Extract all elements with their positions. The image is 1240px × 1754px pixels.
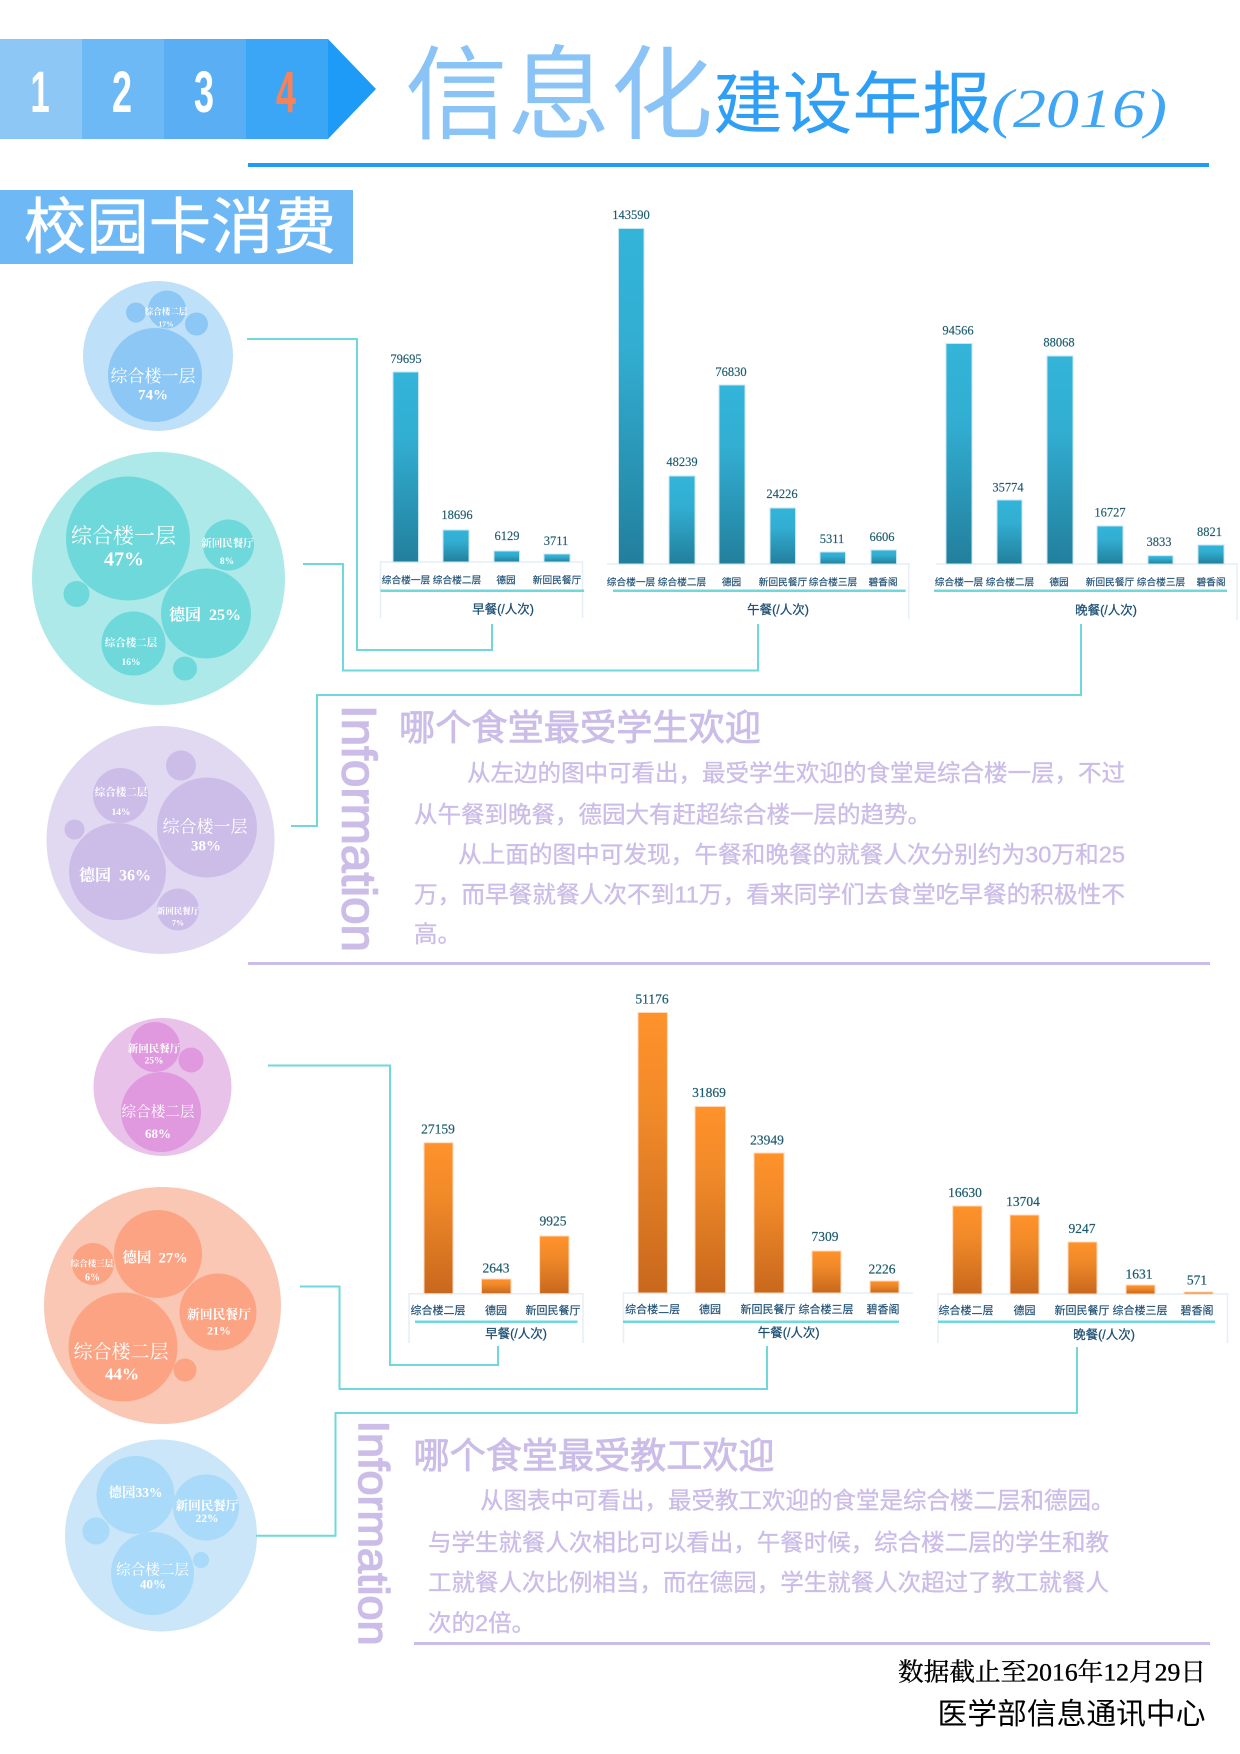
bar chart: staff dinner: 16630	[948, 1185, 982, 1200]
bar chart: staff dinner: 1631	[1126, 1266, 1152, 1282]
bar chart: student breakfast: 综合楼二层	[433, 574, 482, 587]
information panel: staff	[349, 1420, 1114, 1646]
information panel: students	[332, 705, 1125, 952]
bar chart: staff lunch: 7309	[812, 1229, 839, 1244]
bubble chart: staff breakfast	[94, 1018, 232, 1156]
bar chart: staff dinner: 571	[1187, 1272, 1207, 1288]
bubble chart: staff lunch: 21%	[207, 1324, 231, 1338]
bar chart: staff dinner: 德园	[1014, 1303, 1036, 1317]
bar chart: student dinner: 德园	[1049, 576, 1069, 589]
header arrow band: 2	[112, 60, 132, 125]
bar chart: staff breakfast: 2643	[482, 1260, 510, 1276]
bar chart: student dinner: 综合楼三层	[1137, 576, 1186, 589]
bar chart: student lunch: 76830	[715, 365, 747, 379]
bar chart: student dinner: 35774	[992, 480, 1024, 494]
bar chart: staff lunch: 午餐(/人次)	[758, 1325, 820, 1340]
information panel: staff: 与学生就餐人次相比可以看出，午餐时候，综合楼二层的学生和教	[428, 1530, 1109, 1556]
bubble chart: student dinner: 14%	[112, 808, 130, 818]
bar chart: student breakfast: 3711	[544, 534, 568, 548]
bubble chart: student lunch: 综合楼一层	[71, 524, 176, 548]
bar chart: staff dinner: 13704	[1006, 1194, 1040, 1209]
information panel: students: 从上面的图中可发现，午餐和晚餐的就餐人次分别约为30万和25	[458, 842, 1125, 868]
bar chart: student breakfast	[380, 352, 584, 618]
bar chart: staff lunch: 新回民餐厅	[740, 1302, 796, 1316]
bar chart: student lunch: 143590	[612, 208, 650, 222]
bar chart: staff lunch: 综合楼三层	[798, 1302, 854, 1316]
bar chart: student lunch: 48239	[666, 455, 698, 469]
bar chart: staff breakfast: 综合楼二层	[410, 1303, 466, 1317]
bar chart: staff dinner: 9247	[1068, 1221, 1096, 1236]
bar chart: staff dinner: 综合楼二层	[938, 1303, 994, 1317]
bubble chart: staff lunch: 综合楼二层	[73, 1341, 169, 1363]
bar chart: staff breakfast: 早餐(/人次)	[485, 1326, 547, 1341]
bubble chart: student breakfast: 74%	[138, 388, 168, 404]
bar chart: student lunch: 6606	[870, 530, 894, 544]
bar chart: student dinner: 8821	[1197, 525, 1222, 539]
information panel: staff: 哪个食堂最受教工欢迎	[414, 1435, 774, 1476]
bar chart: staff lunch: 51176	[635, 992, 669, 1006]
bar chart: student lunch: 综合楼三层	[809, 575, 858, 588]
section heading: 校园卡消费: 校园卡消费	[24, 193, 336, 261]
bar chart: student lunch: 5311	[820, 532, 844, 546]
header arrow band: 1	[30, 61, 50, 125]
information panel: students: 从左边的图中可看出，最受学生欢迎的食堂是综合楼一层，不过	[467, 760, 1125, 786]
header arrow band: 4	[276, 60, 296, 125]
bar chart: student lunch: 新回民餐厅	[759, 575, 808, 588]
bar chart: student dinner: 综合楼一层	[935, 576, 984, 589]
bar chart: staff dinner: 新回民餐厅	[1054, 1303, 1110, 1317]
bar chart: student lunch: 德园	[722, 575, 741, 588]
bubble chart: student dinner: 综合楼二层	[95, 786, 148, 798]
bar chart: student breakfast: 79695	[390, 352, 422, 366]
information panel: staff: 次的2倍。	[428, 1610, 535, 1636]
information panel: students: Information	[332, 705, 384, 952]
bar chart: student dinner	[934, 324, 1237, 620]
bar chart: student dinner: 晚餐(/人次)	[1075, 602, 1137, 618]
bar chart: staff breakfast: 新回民餐厅	[526, 1303, 580, 1317]
title: (2016)	[991, 78, 1167, 139]
information panel: staff: 从图表中可看出，最受教工欢迎的食堂是综合楼二层和德园。	[480, 1488, 1114, 1514]
bubble chart: student dinner: 新回民餐厅	[157, 906, 200, 916]
bubble chart: staff breakfast: 综合楼二层	[122, 1102, 195, 1120]
bar chart: student breakfast: 综合楼一层	[382, 574, 431, 587]
title: 信息化	[405, 39, 713, 153]
bar chart: student lunch: 综合楼二层	[658, 575, 707, 588]
bubble chart: student breakfast	[83, 281, 233, 431]
bubble chart: staff dinner: 40%	[140, 1576, 166, 1592]
bubble chart: student dinner: 38%	[191, 838, 221, 854]
bar chart: student lunch: 午餐(/人次)	[747, 602, 809, 617]
bar chart: student dinner: 新回民餐厅	[1086, 576, 1135, 589]
bar chart: staff breakfast: 9925	[540, 1214, 567, 1228]
bar chart: student lunch: 碧香阁	[868, 575, 898, 588]
bubble chart: student breakfast: 综合楼二层	[145, 306, 188, 316]
bar chart: student breakfast: 18696	[441, 508, 473, 522]
bar chart: staff dinner	[938, 1185, 1228, 1343]
bar chart: staff breakfast: 27159	[421, 1122, 455, 1136]
bubble chart: staff lunch: 德园 27%	[122, 1248, 188, 1266]
connector lines: staff	[256, 1066, 1077, 1536]
bar chart: staff lunch: 2226	[868, 1262, 896, 1276]
bar chart: staff lunch	[623, 992, 913, 1343]
information panel: students: 从午餐到晚餐，德园大有赶超综合楼一层的趋势。	[414, 802, 931, 828]
information panel: students: 哪个食堂最受学生欢迎	[399, 707, 761, 748]
bubble chart: staff breakfast: 25%	[144, 1056, 164, 1066]
connector lines: student	[247, 339, 1081, 826]
bar chart: staff breakfast	[409, 1122, 583, 1343]
bar chart: student lunch	[607, 208, 910, 619]
bar chart: student dinner: 3833	[1146, 535, 1172, 549]
bubble chart: staff dinner: 22%	[196, 1513, 218, 1525]
bubble chart: staff lunch: 综合楼三层	[71, 1258, 114, 1268]
bubble chart: student dinner	[46, 726, 274, 954]
bubble chart: staff breakfast: 新回民餐厅	[128, 1042, 181, 1055]
bar chart: student breakfast: 6129	[494, 529, 520, 543]
bar chart: student breakfast: 早餐(/人次)	[472, 602, 534, 616]
bubble chart: staff lunch: 44%	[105, 1364, 139, 1384]
bar chart: student dinner: 88068	[1043, 336, 1075, 350]
title: 建设年报	[713, 67, 992, 143]
bar chart: staff dinner: 碧香阁	[1180, 1303, 1214, 1317]
bubble chart: student dinner: 德园 36%	[79, 866, 151, 884]
bubble chart: student dinner: 综合楼一层	[162, 818, 248, 836]
bar chart: staff breakfast: 德园	[485, 1303, 507, 1317]
header arrow band: 3	[194, 60, 214, 125]
bar chart: staff lunch: 综合楼二层	[625, 1302, 680, 1316]
bubble chart: staff dinner: 德园33%	[108, 1484, 162, 1500]
bar chart: student lunch: 24226	[766, 487, 798, 501]
bar chart: staff lunch: 碧香阁	[866, 1302, 900, 1316]
bar chart: student dinner: 16727	[1094, 506, 1126, 520]
bar chart: staff dinner: 综合楼三层	[1112, 1303, 1168, 1317]
bubble chart: student lunch: 综合楼二层	[105, 636, 158, 649]
bar chart: staff dinner: 晚餐(/人次)	[1073, 1327, 1135, 1342]
bar chart: student dinner: 碧香阁	[1196, 576, 1226, 589]
bubble chart: staff lunch: 6%	[85, 1272, 100, 1284]
bubble chart: staff lunch	[44, 1187, 281, 1424]
bubble chart: student lunch	[32, 452, 285, 705]
bar chart: student dinner: 综合楼二层	[986, 576, 1035, 589]
bubble chart: student breakfast: 17%	[158, 320, 174, 328]
bar chart: staff lunch: 23949	[750, 1132, 784, 1148]
bar chart: student dinner: 94566	[942, 324, 974, 338]
bar chart: student breakfast: 德园	[496, 574, 516, 587]
bubble chart: student lunch: 16%	[122, 658, 140, 668]
bubble chart: staff dinner: 综合楼二层	[116, 1560, 189, 1578]
bar chart: student breakfast: 新回民餐厅	[533, 574, 582, 587]
bubble chart: student lunch: 8%	[220, 557, 234, 567]
footer: data date: 数据截止至2016年12月29日	[898, 1658, 1206, 1686]
bubble chart: student lunch: 德园 25%	[169, 605, 241, 624]
information panel: staff: Information	[349, 1420, 397, 1646]
bubble chart: staff breakfast: 68%	[145, 1126, 171, 1141]
title	[405, 39, 1167, 153]
bar chart: student lunch: 综合楼一层	[607, 575, 656, 588]
bar chart: staff lunch: 德园	[699, 1302, 721, 1316]
information panel: staff: 工就餐人次比例相当，而在德园，学生就餐人次超过了教工就餐人	[428, 1570, 1109, 1596]
footer: organisation: 医学部信息通讯中心	[938, 1698, 1206, 1731]
bubble chart: staff dinner	[65, 1440, 257, 1632]
bubble chart: student breakfast: 综合楼一层	[110, 367, 196, 386]
bubble chart: student lunch: 47%	[104, 548, 144, 570]
header arrow band	[0, 39, 376, 139]
information panel: students: 万，而早餐就餐人次不到11万，看来同学们去食堂吃早餐的积极性不	[414, 882, 1125, 908]
information panel: students: 高。	[414, 921, 461, 947]
bar chart: staff lunch: 31869	[692, 1085, 726, 1100]
bubble chart: student dinner: 7%	[172, 918, 184, 928]
bubble chart: staff dinner: 新回民餐厅	[176, 1498, 239, 1513]
bubble chart: staff lunch: 新回民餐厅	[187, 1307, 251, 1322]
bubble chart: student lunch: 新回民餐厅	[201, 536, 254, 550]
